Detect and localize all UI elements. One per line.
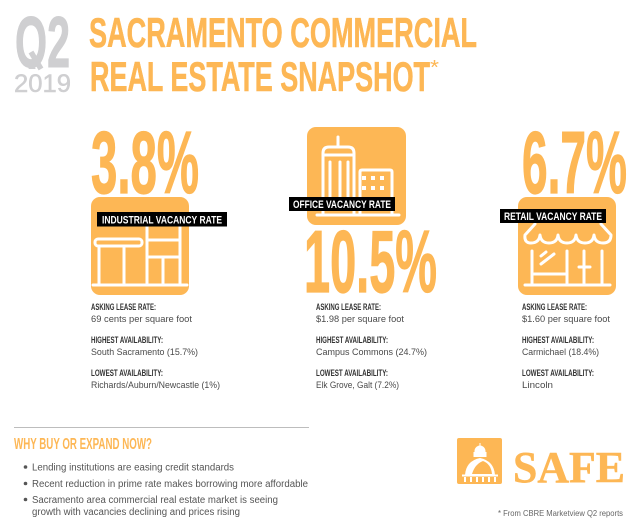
details: retail: LOWEST AVAILABILITY: — [522, 368, 594, 379]
label: industrial vacancy rate — [97, 212, 227, 226]
label: industrial vacancy rate: INDUSTRIAL VACANCY RATE — [102, 214, 222, 226]
panel: office vacancy — [289, 127, 437, 391]
details: office: HIGHEST AVAILABILITY: — [316, 335, 388, 346]
details: retail: $1.60 per square foot — [522, 314, 610, 325]
details: industrial: HIGHEST AVAILABILITY: — [91, 335, 163, 346]
quarter badge: Q2 2019 — [15, 16, 70, 92]
details: retail: Carmichael (18.4%) — [522, 347, 599, 358]
logo: SAFE — [457, 438, 625, 492]
title: REAL ESTATE SNAPSHOT — [90, 53, 430, 100]
panel: industrial vacancy — [91, 113, 227, 391]
bullet list: Lending institutions are easing credit standards — [32, 462, 234, 474]
bullet list — [24, 462, 309, 518]
details: retail: HIGHEST AVAILABILITY: — [522, 335, 594, 346]
details: industrial — [91, 302, 220, 391]
footnote: * From CBRE Marketview Q2 reports — [498, 508, 623, 518]
details: industrial: South Sacramento (15.7%) — [91, 347, 198, 358]
bullet list: Recent reduction in prime rate makes borrowing more affordable — [32, 479, 309, 490]
quarter badge: Q2 2019: Q2 — [15, 3, 70, 83]
stat: 3.8%: 3.8% — [91, 113, 199, 212]
details: office: $1.98 per square foot — [316, 314, 404, 325]
details: retail — [522, 302, 610, 391]
details: retail: ASKING LEASE RATE: — [522, 302, 587, 313]
details: industrial: LOWEST AVAILABILITY: — [91, 368, 163, 379]
details: retail: Lincoln — [522, 380, 553, 391]
label: office vacancy rate — [289, 197, 395, 211]
details: office: Elk Grove, Galt (7.2%) — [316, 380, 399, 391]
details: office: LOWEST AVAILABILITY: — [316, 368, 388, 379]
icon: storefront — [518, 197, 616, 295]
stat: 10.5%: 10.5% — [304, 212, 437, 311]
title: * — [430, 57, 439, 79]
label: retail vacancy rate: RETAIL VACANCY RATE — [504, 211, 602, 223]
details: industrial: 69 cents per square foot — [91, 314, 192, 325]
details: office — [316, 302, 427, 391]
label: office vacancy rate: OFFICE VACANCY RATE — [293, 199, 391, 211]
quarter badge: Q2 2019: 2019 — [14, 70, 71, 98]
logo: SAFE: SAFE — [513, 443, 625, 492]
details: office: Campus Commons (24.7%) — [316, 347, 427, 358]
details: office: ASKING LEASE RATE: — [316, 302, 381, 313]
bullet list: Sacramento area commercial real estate market is seeing — [32, 495, 278, 506]
icon: office buildings — [307, 127, 406, 225]
section heading: why buy or expand now: WHY BUY OR EXPAND NOW? — [14, 436, 152, 453]
title — [89, 9, 477, 100]
details: industrial: Richards/Auburn/Newcastle (1%) — [91, 380, 220, 391]
details: industrial: ASKING LEASE RATE: — [91, 302, 156, 313]
label: retail vacancy rate — [500, 209, 606, 223]
panel: retail vacancy — [500, 113, 627, 391]
bullet list: growth with vacancies declining and prices rising — [32, 507, 240, 518]
icon: industrial building — [91, 197, 189, 295]
